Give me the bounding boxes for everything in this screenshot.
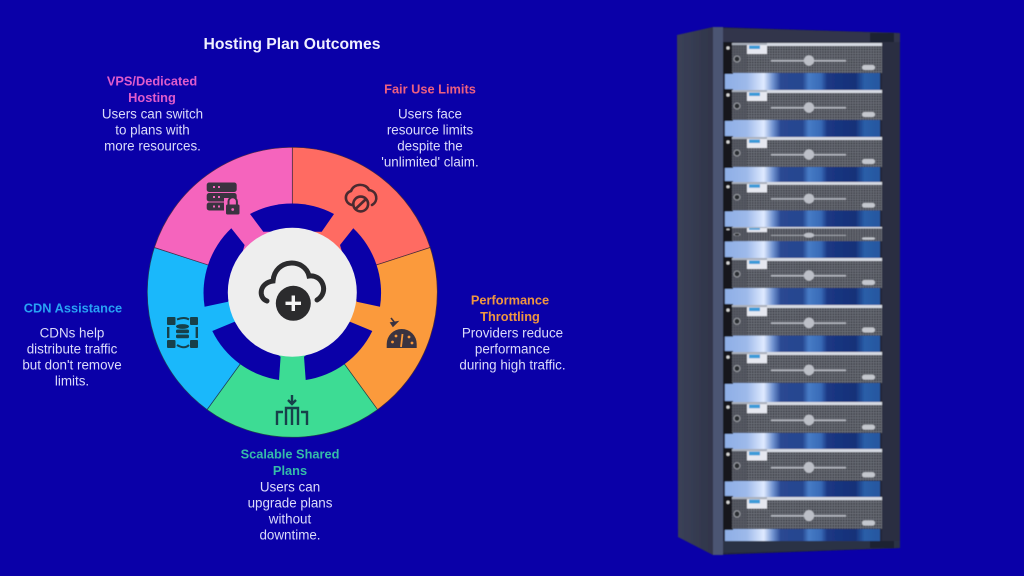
label: Performance Throttling: Throttling [480, 309, 540, 324]
label: Fair Use Limits: Users face [398, 106, 462, 122]
rack front frame [713, 27, 900, 555]
label: VPS/Dedicated Hosting: VPS/Dedicated [107, 74, 197, 88]
server units [723, 42, 882, 530]
label: Scalable Shared Plans: Plans [273, 463, 307, 478]
segment: fair use limits [292, 147, 430, 292]
label: CDN Assistance: but don't remove [22, 358, 122, 372]
label: Scalable Shared Plans: without [268, 512, 311, 526]
centre circle [228, 228, 357, 357]
label: Performance Throttling: performance [475, 342, 550, 356]
label: Performance Throttling: Performance [471, 292, 549, 308]
segment: CDN assistance [147, 248, 292, 410]
label: Scalable Shared Plans: Users can [260, 480, 320, 494]
label: Performance Throttling: Providers reduce [462, 326, 563, 340]
light strips between servers [725, 73, 880, 541]
label: Scalable Shared Plans: upgrade plans [248, 496, 333, 510]
label: Fair Use Limits: despite the [397, 138, 463, 154]
label: Fair Use Limits: resource limits [387, 122, 473, 138]
label: CDN Assistance: distribute traffic [27, 342, 118, 356]
label: VPS/Dedicated Hosting: more resources. [104, 138, 201, 154]
label: Scalable Shared Plans: downtime. [259, 528, 321, 542]
label: VPS/Dedicated Hosting: to plans with [115, 122, 190, 138]
label: Fair Use Limits: 'unlimited' claim. [381, 154, 479, 170]
label: VPS/Dedicated Hosting: Hosting [128, 90, 176, 105]
label: CDN Assistance [22, 300, 122, 388]
icon: speed gauge [387, 318, 417, 348]
inner ring cutouts [204, 203, 381, 380]
icon: cloud with ban sign [346, 185, 376, 211]
rack side panel [677, 27, 713, 555]
label: VPS/Dedicated Hosting [102, 74, 203, 154]
icon: server with lock [207, 182, 241, 216]
label: VPS/Dedicated Hosting: Users can switch [102, 106, 203, 122]
segment: performance throttling [292, 248, 437, 410]
icon: scaling arrow and bars [277, 395, 307, 425]
label: Fair Use Limits: Fair Use Limits [384, 82, 476, 96]
segment: VPS dedicated hosting [154, 147, 292, 292]
label: CDN Assistance: limits. [55, 374, 89, 388]
label: Scalable Shared Plans: Scalable Shared [241, 446, 339, 462]
label: Performance Throttling [459, 292, 566, 372]
segment: scalable shared plans [207, 292, 378, 437]
wheel diagram [147, 147, 437, 437]
title: Hosting Plan Outcomes [204, 36, 381, 53]
label: Scalable Shared Plans [241, 446, 339, 542]
label: CDN Assistance: CDN Assistance [24, 300, 122, 316]
icon: cloud with plus [261, 263, 324, 321]
label: Performance Throttling: during high traffic. [459, 358, 566, 372]
icon: database with nodes [167, 317, 198, 348]
label: Fair Use Limits [381, 82, 479, 170]
label: CDN Assistance: CDNs help [40, 326, 104, 340]
server rack image [677, 27, 900, 555]
